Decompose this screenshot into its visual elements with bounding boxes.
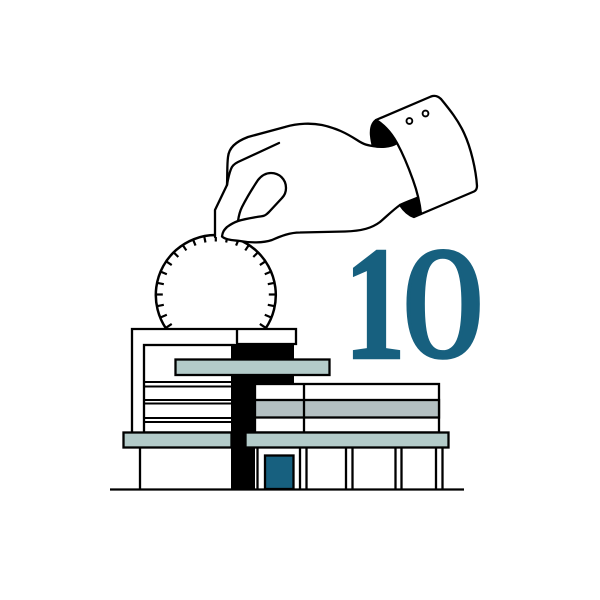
coin dial: [156, 234, 276, 328]
index finger crease: [227, 143, 279, 185]
ground line: [110, 488, 464, 491]
cuff button 2: [423, 111, 428, 116]
right wing band: [255, 400, 439, 418]
cuff opening bottom: [400, 198, 421, 217]
right wing: [255, 384, 439, 432]
inner wall block: [144, 345, 234, 432]
number 10: [344, 215, 484, 394]
louvre lines: [144, 382, 232, 422]
hand fill: [215, 124, 400, 242]
hand bottom outline and thumb: [222, 205, 400, 242]
ground floor left: [139, 448, 141, 489]
door: [265, 456, 294, 489]
building: [110, 329, 464, 490]
lower slab left: [124, 432, 232, 448]
ground floor columns: [258, 448, 442, 489]
hand with cuff: [215, 96, 477, 242]
upper teal slab: [176, 360, 330, 375]
number 10: 1: [344, 215, 406, 394]
lower slab right: [246, 432, 448, 448]
right wing divider: [303, 384, 305, 432]
hand top outline: [215, 124, 375, 237]
number 10: 0: [402, 215, 484, 391]
black core: [231, 344, 294, 489]
cuff button 1: [406, 118, 412, 124]
cuff opening top: [371, 120, 397, 147]
cuff: [376, 96, 477, 214]
finger loop: [238, 173, 286, 221]
upper roof and left wall: [132, 329, 296, 432]
